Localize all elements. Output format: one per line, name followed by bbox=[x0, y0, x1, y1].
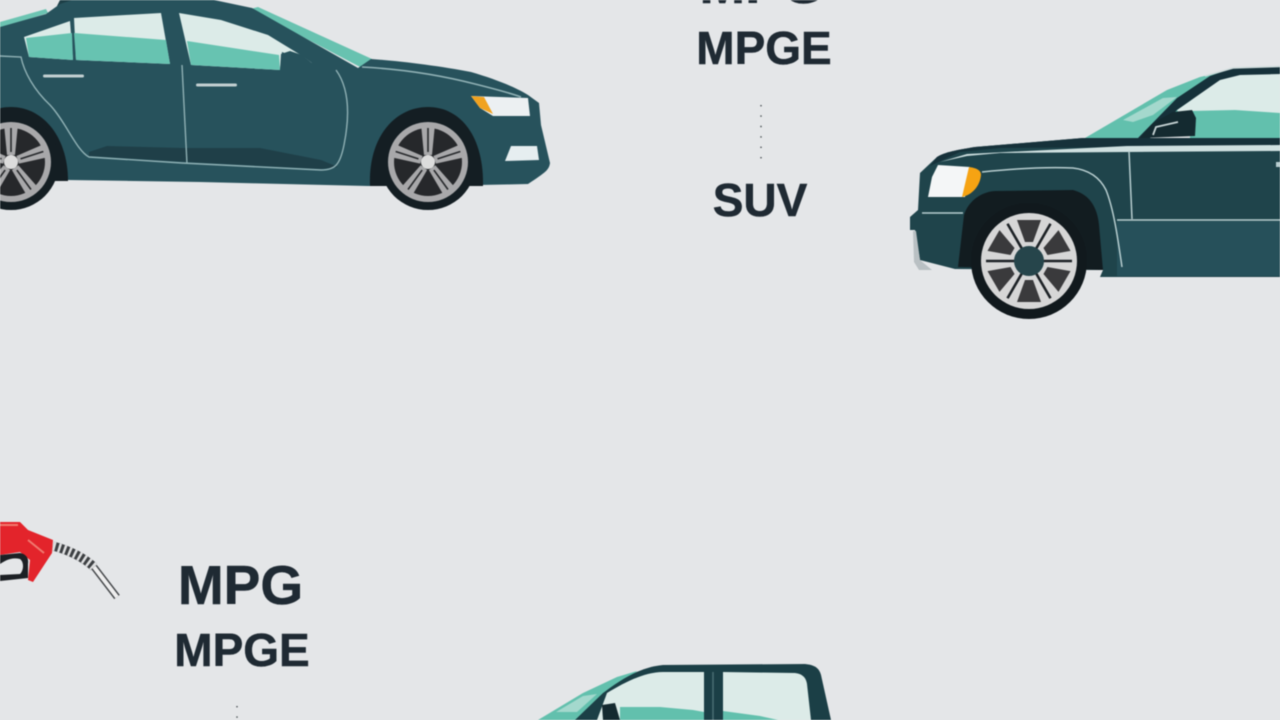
truck side mirror bbox=[602, 703, 620, 720]
SUV hood dark top bbox=[930, 138, 1280, 166]
SUV roof highlight bbox=[1205, 66, 1280, 76]
SUV windshield bbox=[1085, 72, 1222, 138]
truck rear window bbox=[723, 672, 811, 720]
sedan fog light bbox=[505, 146, 539, 161]
sedan front door handle bbox=[196, 84, 237, 86]
sedan roof sliver bbox=[0, 9, 48, 28]
SUV white stripe bbox=[940, 145, 1280, 162]
nozzle trigger guard bbox=[0, 553, 28, 581]
sedan car illustration bbox=[0, 0, 550, 210]
sedan roof rack bbox=[57, 0, 72, 6]
top dotted connector bbox=[760, 105, 762, 160]
SUV door detail bbox=[1276, 162, 1280, 167]
lower MPGE label: MPGE bbox=[174, 624, 310, 676]
sedan headlight bbox=[471, 96, 530, 116]
SUV lower panel tint bbox=[1117, 221, 1280, 276]
truck cab frame bbox=[575, 664, 831, 720]
sedan rear wheel bbox=[0, 107, 68, 210]
lower MPG label: MPG bbox=[178, 554, 303, 616]
sedan door lines bbox=[0, 56, 521, 170]
SUV wheel bbox=[971, 203, 1087, 319]
sedan lower door shadow bbox=[89, 146, 338, 169]
SUV silver bumper bbox=[913, 231, 932, 270]
nozzle red body bbox=[0, 522, 53, 582]
fuel nozzle icon bbox=[0, 522, 117, 597]
SUV wheel arch bbox=[958, 190, 1103, 270]
fuel hose coiled section bbox=[53, 546, 94, 567]
SUV side mirror bbox=[1140, 110, 1196, 138]
top MPGE label: MPGE bbox=[696, 22, 832, 74]
SUV roof and pillar bbox=[1138, 66, 1280, 138]
SUV car illustration bbox=[910, 66, 1280, 319]
sedan rear door handle bbox=[43, 74, 84, 78]
nozzle highlight bbox=[0, 525, 44, 553]
SUV body lines bbox=[922, 151, 1280, 267]
sedan windshield bbox=[250, 7, 372, 68]
SUV label: SUV bbox=[713, 174, 808, 226]
truck windshield bbox=[538, 671, 637, 720]
sedan front wheel bbox=[370, 107, 483, 210]
sedan body bbox=[0, 0, 550, 186]
sedan front window bbox=[179, 13, 312, 70]
lower truck illustration bbox=[538, 664, 831, 720]
truck front window bbox=[597, 672, 704, 720]
lower dotted connector bbox=[236, 706, 238, 720]
SUV body bbox=[910, 138, 1280, 277]
SUV side window bbox=[1177, 74, 1280, 138]
SUV headlight bbox=[928, 165, 981, 197]
fuel hose end section bbox=[94, 567, 117, 597]
sedan rear window bbox=[24, 21, 73, 60]
truck pillar highlight bbox=[712, 672, 714, 720]
sedan middle window bbox=[74, 13, 170, 64]
sedan side mirror bbox=[280, 51, 318, 70]
